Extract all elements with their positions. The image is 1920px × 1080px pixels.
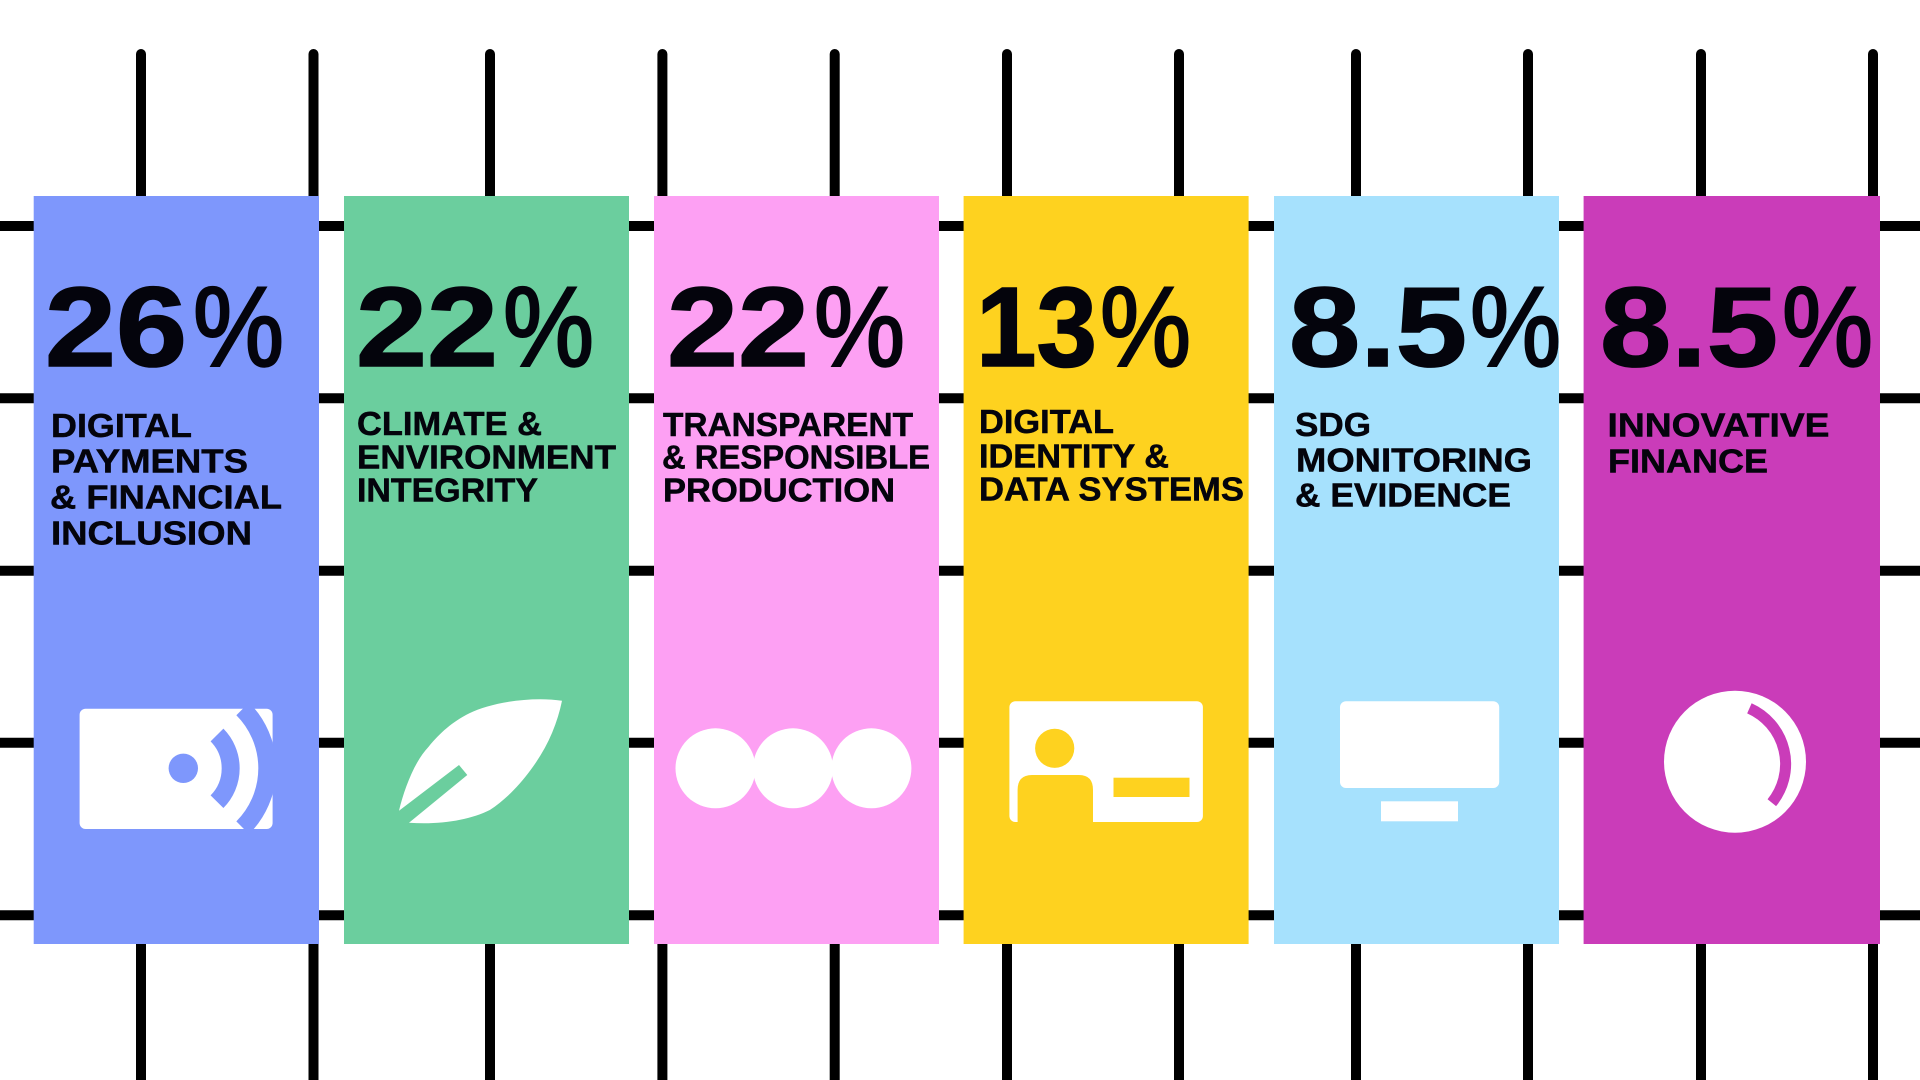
percentage 13%: 13	[976, 264, 1097, 390]
label: SDG monitoring and evidence	[1295, 406, 1532, 514]
panel: innovative finance	[1584, 196, 1880, 944]
panel: transparent and responsible production	[654, 196, 939, 944]
panel background light blue	[1274, 196, 1559, 944]
label: innovative finance	[1608, 407, 1830, 480]
percentage 22%: %	[503, 264, 594, 390]
panel background blue	[34, 196, 319, 944]
label: digital identity and data systems: IDENTITY &	[979, 438, 1169, 475]
percentage 26%: 26	[45, 264, 187, 390]
label: digital payments and financial inclusion: DIGITAL	[51, 407, 192, 444]
icon: coin	[1664, 691, 1806, 833]
label: digital payments and financial inclusion	[50, 407, 282, 552]
percentage 8.5%	[1600, 264, 1873, 390]
icon: monitor	[1340, 701, 1499, 821]
icon: contactless payment card	[80, 709, 273, 829]
panel: SDG monitoring and evidence	[1274, 196, 1561, 944]
label: SDG monitoring and evidence: SDG	[1295, 406, 1371, 443]
label: climate and environment integrity	[357, 405, 616, 509]
percentage 13%: %	[1100, 264, 1191, 390]
label: digital identity and data systems: DIGITAL	[979, 403, 1114, 440]
panel background green	[344, 196, 629, 944]
label: digital payments and financial inclusion: PAYMENTS	[51, 442, 248, 480]
label: transparent and responsible production: TRANSPARENT	[663, 406, 913, 443]
panel background pink	[654, 196, 939, 944]
percentage 8.5%: 8.5	[1600, 264, 1778, 390]
percentage 8.5%	[1289, 264, 1561, 390]
panel: digital identity and data systems	[964, 196, 1249, 944]
label: digital identity and data systems	[979, 403, 1244, 508]
percentage 22%	[356, 264, 594, 390]
label: digital payments and financial inclusion: & FINANCIAL	[50, 478, 282, 516]
label: SDG monitoring and evidence: MONITORING	[1296, 442, 1532, 479]
label: transparent and responsible production	[662, 406, 930, 509]
percentage 8.5%: %	[1470, 264, 1561, 390]
label: climate and environment integrity: INTEGRITY	[357, 472, 538, 509]
percentage 26%	[45, 264, 284, 390]
percentage 8.5%: %	[1782, 264, 1873, 390]
label: transparent and responsible production: & RESPONSIBLE	[662, 439, 930, 476]
label: transparent and responsible production: PRODUCTION	[663, 472, 895, 509]
percentage 26%: %	[193, 264, 284, 390]
panel: digital payments and financial inclusion	[34, 196, 319, 944]
label: innovative finance: FINANCE	[1608, 443, 1768, 480]
icon: leaf	[399, 699, 562, 823]
label: innovative finance: INNOVATIVE	[1608, 407, 1830, 444]
percentage 22%: %	[814, 264, 905, 390]
icon: identity card	[1009, 701, 1203, 824]
label: digital identity and data systems: DATA SYSTEMS	[979, 471, 1244, 508]
label: climate and environment integrity: ENVIRONMENT	[357, 439, 616, 476]
panel: climate and environment integrity	[344, 196, 629, 944]
icon: three circles	[676, 728, 911, 808]
percentage 22%: 22	[356, 264, 498, 390]
percentage 22%: 22	[667, 264, 809, 390]
percentage 8.5%: 8.5	[1289, 264, 1467, 390]
panel background yellow	[964, 196, 1249, 944]
percentage 13%	[976, 264, 1191, 390]
label: climate and environment integrity: CLIMATE &	[357, 405, 542, 442]
label: SDG monitoring and evidence: & EVIDENCE	[1295, 477, 1511, 514]
percentage 22%	[667, 264, 905, 390]
panel background purple	[1584, 196, 1880, 944]
label: digital payments and financial inclusion: INCLUSION	[51, 514, 252, 552]
